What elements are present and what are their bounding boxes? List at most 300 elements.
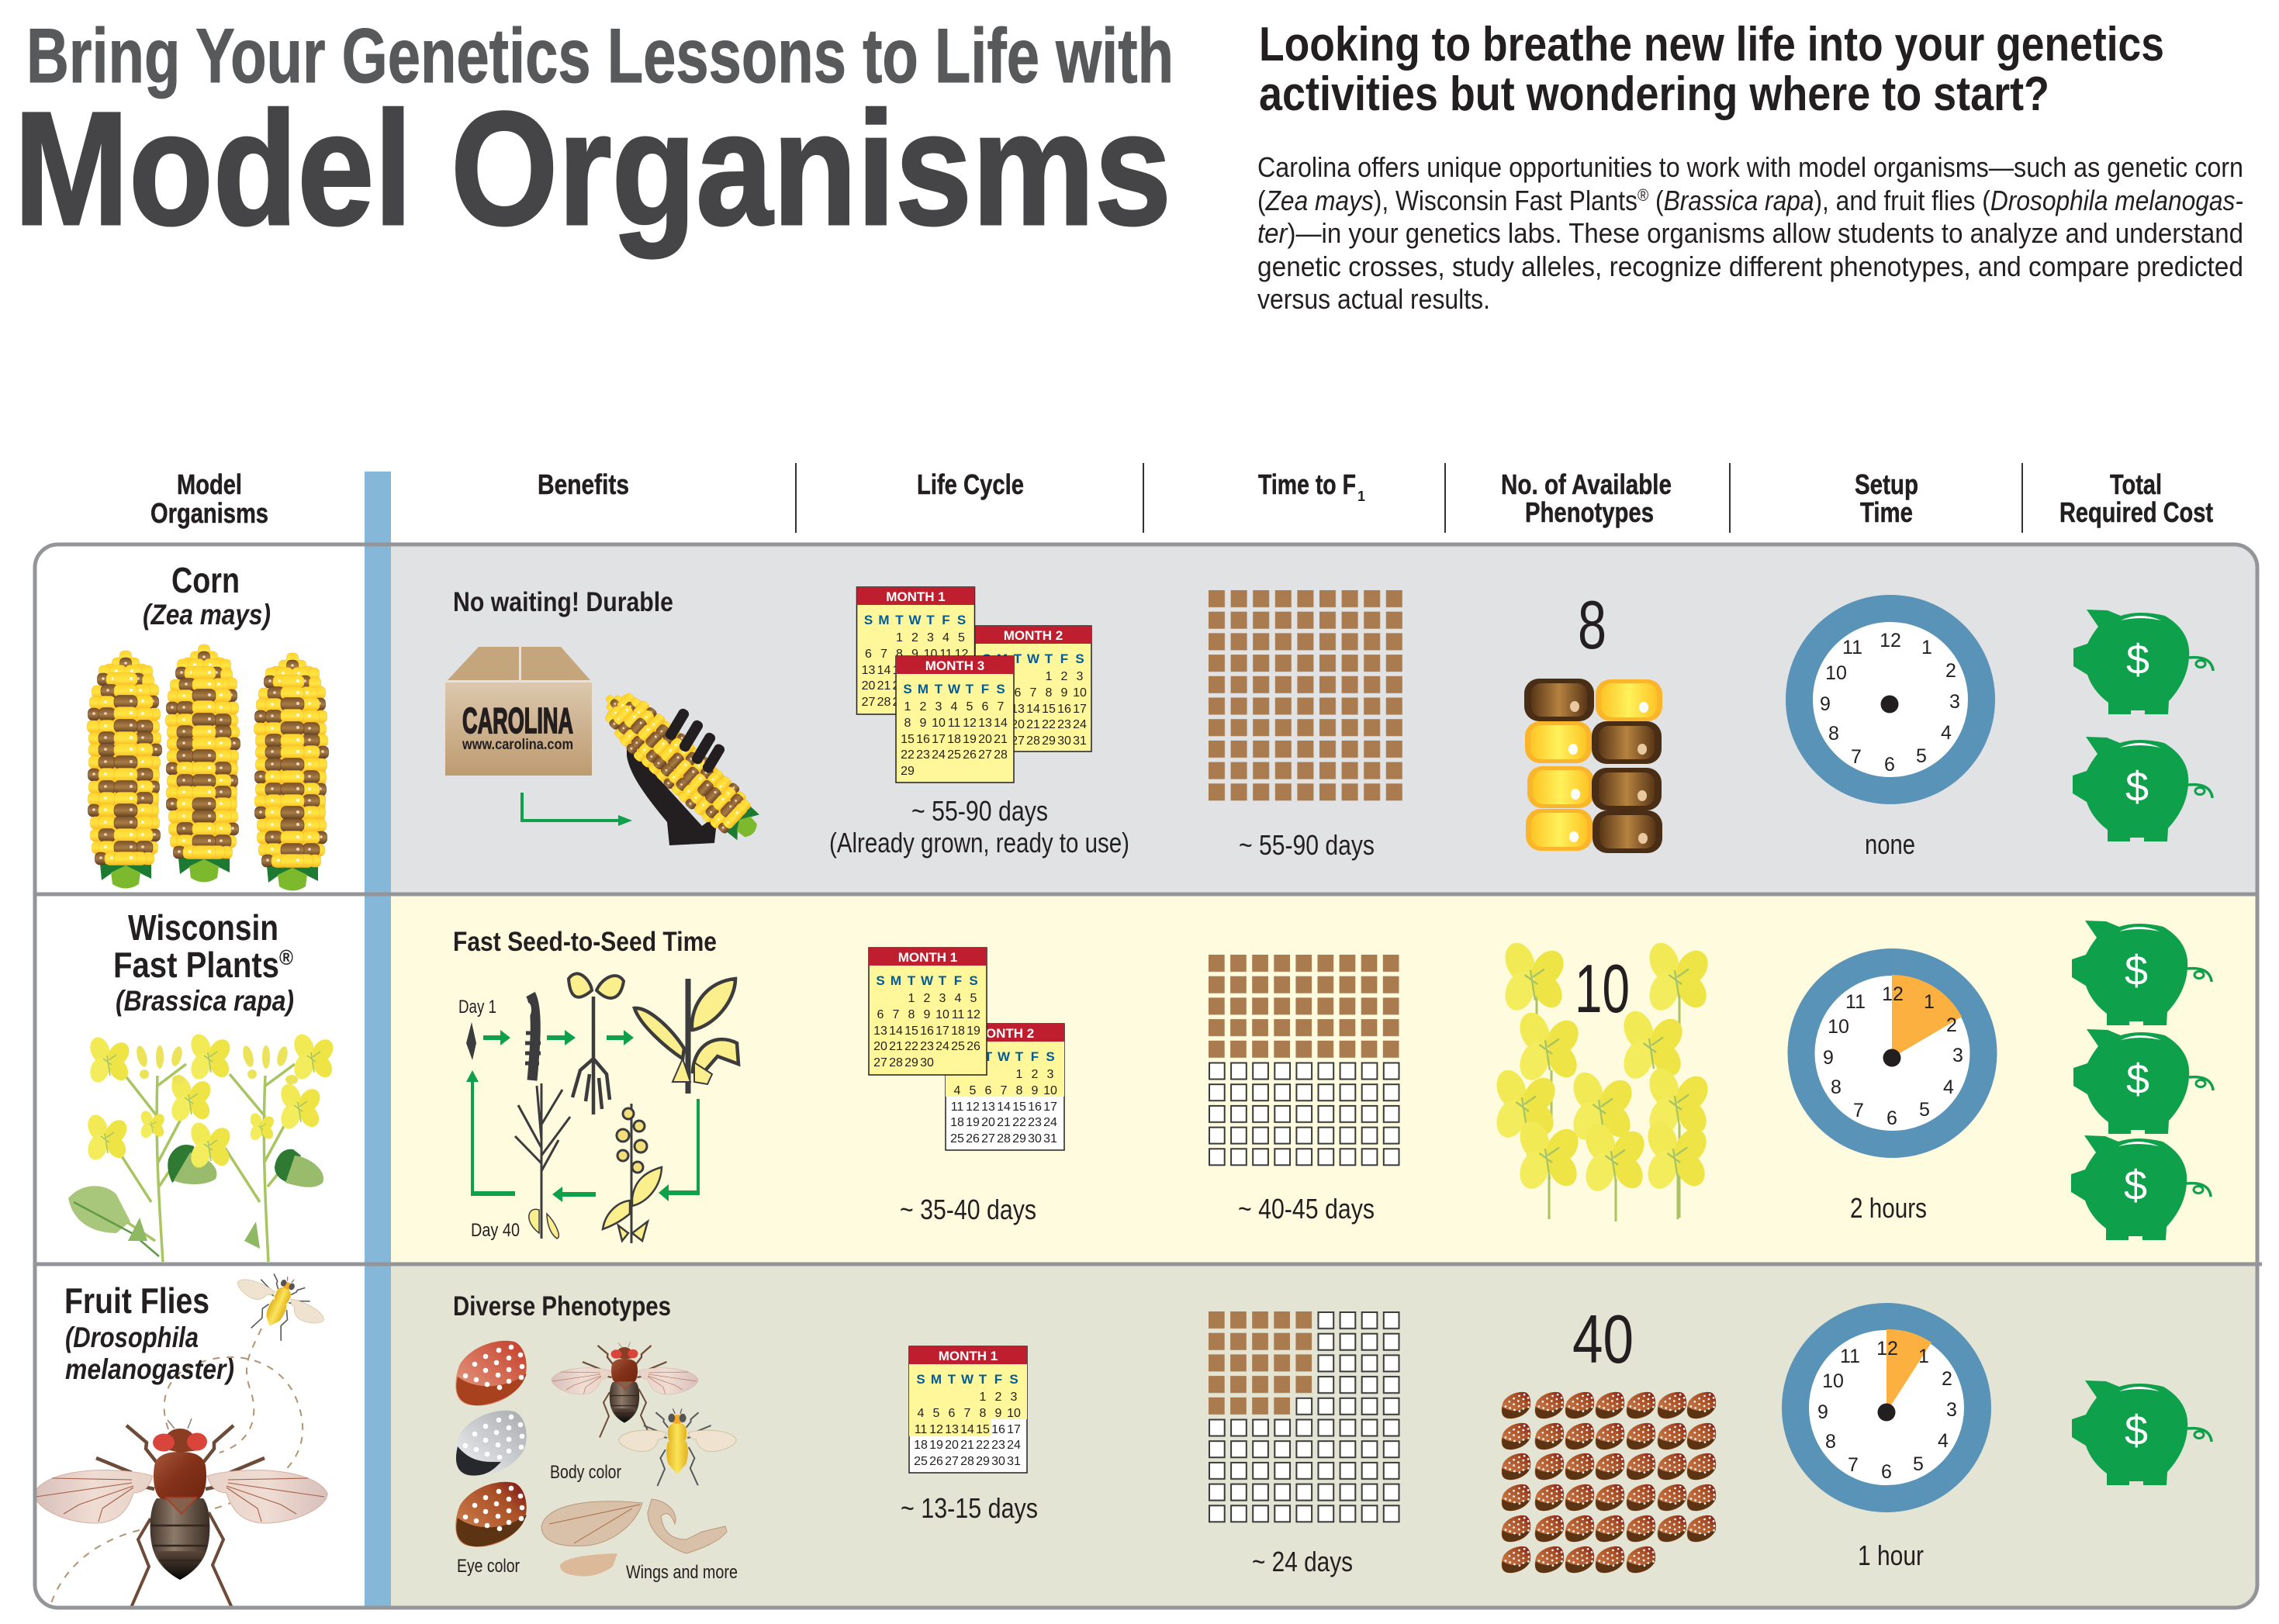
calendar month 1: 9 — [924, 1008, 931, 1021]
icon: piggy bank cost: $ — [2126, 1056, 2149, 1103]
calendar month 1: 7 — [880, 648, 887, 661]
table column headers: Required Cost — [2059, 496, 2213, 528]
calendar month 2: S — [1046, 1049, 1055, 1064]
intro paragraph: versus actual results. — [1257, 283, 1490, 315]
calendar month 2: 19 — [995, 718, 1009, 731]
calendar month 1: 20 — [862, 679, 875, 693]
fast plants benefit heading: Fast Seed-to-Seed Time — [453, 927, 717, 957]
calendar month 1: 24 — [1007, 1439, 1021, 1452]
calendar month 2: 24 — [1073, 718, 1087, 731]
calendar month 2: 27 — [1011, 734, 1025, 748]
fruit flies phenotype count: 40 — [1572, 1301, 1634, 1377]
calendar month 2: 2 — [1032, 1068, 1039, 1081]
icons: body color flies — [552, 1342, 736, 1486]
fast plants name — [113, 907, 294, 1017]
clock: no setup time: 6 — [1884, 754, 1895, 776]
corn name: Corn — [171, 560, 240, 600]
calendar month 1: 5 — [970, 992, 977, 1005]
corn phenotype count: 8 — [1578, 586, 1606, 663]
calendars: fast plants life cycle — [869, 948, 1064, 1150]
corn name: (Zea mays) — [143, 599, 271, 631]
calendar month 1: 19 — [967, 1025, 980, 1038]
calendar month 1: 13 — [862, 664, 875, 677]
calendar month 2: W — [1027, 651, 1040, 666]
table column headers — [150, 463, 2213, 533]
calendar month 2: 25 — [950, 1132, 964, 1145]
row: Wisconsin Fast Plants — [68, 907, 2213, 1262]
calendar month 2: S — [953, 1049, 962, 1064]
table column headers: Total — [2110, 468, 2162, 500]
intro paragraph: Brassica rapa), and fruit flies (Drosophila melanogas- — [1664, 185, 2277, 216]
calendar month 1: 22 — [893, 679, 906, 693]
icon: corn kernels — [1524, 679, 1662, 853]
calendar month 1: 3 — [1011, 1391, 1018, 1404]
clock: one hour setup — [1795, 1317, 1978, 1498]
table column headers: Benefits — [538, 468, 629, 500]
icon: piggy bank cost: $ — [2126, 637, 2149, 683]
illustration: small yellow fly — [223, 1259, 334, 1353]
calendar month 1: 12 — [955, 648, 968, 661]
calendar month 2: 10 — [1073, 686, 1087, 700]
calendar month 2: 7 — [1001, 1084, 1008, 1097]
calendar month 3: 21 — [994, 733, 1008, 746]
calendar month 1: 16 — [991, 1423, 1005, 1436]
calendar month 1: T — [979, 1372, 987, 1387]
fast plants phenotype count: 10 — [1575, 950, 1630, 1027]
calendar month 2: 13 — [981, 1101, 995, 1114]
setup label: 1 hour — [1858, 1539, 1924, 1571]
calendar month 1: 16 — [908, 664, 922, 677]
fruit flies name: Fruit Flies — [64, 1280, 209, 1321]
clock: two hours setup: 11 — [1845, 991, 1866, 1013]
calendar month 1: 26 — [967, 1040, 980, 1053]
corn name — [143, 560, 271, 631]
clock: no setup time: 12 — [1880, 630, 1901, 651]
calendar month 1: 7 — [964, 1407, 971, 1420]
corn time to F1 label: ~ 55-90 days — [1239, 829, 1375, 861]
calendar month 1: 27 — [862, 696, 875, 709]
icon: piggy bank cost — [2073, 610, 2213, 841]
table column headers: Phenotypes — [1525, 496, 1654, 528]
calendar month 2: T — [1014, 651, 1022, 666]
calendar month 3: MONTH 3 — [925, 658, 984, 673]
calendar month 1: 27 — [945, 1455, 959, 1468]
calendar month 2: M — [967, 1049, 978, 1064]
calendar month 1: S — [969, 973, 978, 988]
calendar month 1: S — [876, 973, 885, 988]
intro paragraph: ( — [1648, 185, 1664, 216]
clock: one hour setup: 3 — [1946, 1399, 1957, 1421]
calendar month 1: 11 — [952, 1008, 964, 1021]
calendar month 2: 29 — [1012, 1132, 1026, 1145]
intro heading — [1259, 18, 2164, 121]
calendar month 1: 4 — [955, 992, 962, 1005]
calendar month 3: 23 — [916, 748, 930, 762]
calendar month 1: 14 — [877, 664, 891, 677]
calendar month 1: 5 — [958, 631, 965, 644]
diagram: seed to seed life cycle — [458, 973, 738, 1243]
intro paragraph — [1257, 151, 2243, 315]
clock: no setup time: 1 — [1921, 637, 1932, 658]
calendar month 3: T — [966, 682, 974, 696]
calendar month 1: 30 — [991, 1455, 1005, 1468]
fast plants name: Fast Plants — [113, 945, 303, 985]
calendar month 1: T — [948, 1372, 956, 1387]
calendar month 2: 28 — [1026, 734, 1040, 748]
calendar month 2: 10 — [1043, 1084, 1057, 1097]
calendar month 2: 19 — [966, 1116, 980, 1129]
calendar month 1: S — [916, 1372, 925, 1387]
calendar month 2: 7 — [1030, 686, 1037, 700]
calendar month 2: 5 — [970, 1084, 977, 1097]
calendar month 1: 30 — [908, 696, 922, 709]
calendar month 2: 8 — [1046, 686, 1053, 700]
calendar month 2: 17 — [1043, 1101, 1057, 1114]
clock: no setup time: 2 — [1945, 660, 1956, 682]
calendar month 3: F — [981, 682, 989, 696]
title: Bring Your Genetics Lessons to Life with — [26, 12, 1174, 98]
calendar month 1: 24 — [924, 679, 937, 693]
calendar month 2: 16 — [1028, 1101, 1042, 1114]
title — [14, 12, 1174, 259]
clock: no setup time: 11 — [1842, 637, 1862, 658]
corn life cycle label: (Already grown, ready to use) — [829, 827, 1129, 859]
clock: two hours setup: 4 — [1943, 1076, 1954, 1098]
arrow head — [618, 815, 632, 826]
fruit flies name: (Drosophila — [65, 1322, 199, 1353]
table column headers: Model — [177, 468, 242, 500]
calendar month 2: T — [1045, 651, 1053, 666]
calendar month 2: 9 — [1061, 686, 1068, 700]
clock: no setup time: 9 — [1820, 693, 1831, 715]
clock: one hour setup: 6 — [1881, 1461, 1892, 1483]
calendar month 1: 23 — [908, 679, 922, 693]
calendar month 2: 21 — [1026, 718, 1040, 731]
corn benefit heading: No waiting! Durable — [453, 587, 673, 617]
calendar month 3: 2 — [920, 700, 927, 714]
illustration: corn cobs — [87, 644, 329, 890]
calendar month 1: S — [957, 613, 966, 627]
icon: Carolina box: www.carolina.com — [462, 737, 573, 753]
row: corn — [87, 560, 2213, 890]
calendar month 3: 24 — [932, 748, 946, 762]
calendar month 1: M — [931, 1372, 942, 1387]
clock: two hours setup: 9 — [1823, 1047, 1834, 1069]
fruit flies name: melanogaster) — [65, 1353, 234, 1385]
calendar month 2: 25 — [980, 734, 994, 748]
eye color label: Eye color — [457, 1556, 520, 1577]
calendar month 2: 4 — [954, 1084, 961, 1097]
table frame — [35, 544, 2262, 1608]
calendar month 1: 15 — [904, 1025, 918, 1038]
icon: piggy bank cost: $ — [2125, 948, 2148, 994]
table column headers: Setup — [1855, 468, 1918, 500]
calendar month 2: 2 — [1061, 670, 1068, 683]
calendar month 1: 21 — [889, 1040, 903, 1053]
calendar month 1: 19 — [929, 1439, 943, 1452]
calendar month 3: 27 — [978, 748, 992, 762]
calendar month 1: 12 — [967, 1008, 980, 1021]
calendar month 1: 8 — [908, 1008, 915, 1021]
calendar month 2 — [975, 626, 1091, 752]
intro heading: Looking to breathe new life into your genetics — [1259, 18, 2164, 71]
calendar month 1: 20 — [873, 1040, 887, 1053]
calendar month 2: 18 — [980, 718, 994, 731]
calendar month 2: S — [982, 651, 991, 666]
calendar month 2: 31 — [1043, 1132, 1057, 1145]
calendar month 2: 15 — [1042, 703, 1056, 716]
clock: two hours setup: 10 — [1828, 1016, 1849, 1038]
wings label: Wings and more — [626, 1562, 738, 1583]
icon: piggy bank cost: $ — [2125, 764, 2149, 810]
calendar month 1: M — [878, 613, 890, 627]
calendar month 1: 11 — [939, 648, 953, 661]
calendar month 2: 20 — [981, 1116, 995, 1129]
calendar month 1: MONTH 1 — [939, 1349, 998, 1363]
calendar month 1: 28 — [877, 696, 891, 709]
table background — [35, 472, 2257, 1608]
calendar month 2 — [946, 1024, 1064, 1150]
fast plants time to F1 label: ~ 40-45 days — [1238, 1193, 1375, 1225]
calendar month 3: 17 — [932, 733, 946, 746]
calendar month 3: S — [903, 682, 912, 696]
icon: piggy bank cost: $ — [2124, 1163, 2147, 1209]
day 1 label: Day 1 — [458, 997, 496, 1018]
calendar month 3: 3 — [935, 700, 942, 714]
calendar month 1: 17 — [1007, 1423, 1021, 1436]
calendar month 1: 18 — [914, 1439, 928, 1452]
calendar month 3: 14 — [994, 717, 1008, 730]
chart: fast plants time to F1 squares — [1209, 955, 1404, 1170]
calendar month 2: 18 — [950, 1116, 964, 1129]
calendar month 2: 22 — [1042, 718, 1056, 731]
clock: one hour setup: 8 — [1825, 1431, 1836, 1453]
calendar month 1: 5 — [933, 1407, 940, 1420]
calendar month 1: 21 — [877, 679, 891, 693]
table column headers: 1 — [1357, 489, 1365, 504]
calendar month 1: 4 — [918, 1407, 925, 1420]
calendar month 3: 6 — [982, 700, 989, 714]
calendar month 1: 6 — [865, 648, 872, 661]
clock: no setup time: 10 — [1825, 662, 1847, 684]
fast plants name: ® — [279, 945, 293, 969]
calendar month 1: 23 — [991, 1439, 1005, 1452]
fruit flies benefit heading: Diverse Phenotypes — [453, 1291, 671, 1322]
calendar month 2: 16 — [1057, 703, 1071, 716]
calendar month 3: 18 — [947, 733, 961, 746]
clock: no setup time: 5 — [1916, 745, 1927, 767]
icon: piggy bank cost — [2071, 921, 2213, 1240]
table column headers: Time — [1860, 496, 1913, 528]
calendar month 2: 13 — [1011, 703, 1025, 716]
cycle arrows — [466, 1030, 700, 1202]
calendar month 2: 21 — [997, 1116, 1011, 1129]
calendar month 2: 31 — [1073, 734, 1087, 748]
calendar month 3 — [896, 656, 1014, 783]
calendar month 1: 18 — [951, 1025, 965, 1038]
calendar month 2: F — [1031, 1049, 1039, 1064]
calendar month 1: 13 — [945, 1423, 959, 1436]
clock: no setup time: 4 — [1941, 722, 1952, 744]
calendar month 1: 14 — [889, 1025, 903, 1038]
calendar month 1: 10 — [1007, 1407, 1021, 1420]
calendar month 1: 29 — [976, 1455, 990, 1468]
calendar month 2: 29 — [1042, 734, 1056, 748]
calendar month 1: 25 — [939, 679, 953, 693]
calendar month 2: 26 — [966, 1132, 980, 1145]
clock: two hours setup: 1 — [1924, 991, 1935, 1013]
calendar month 1: 18 — [939, 664, 953, 677]
calendar month 2: F — [1060, 651, 1068, 666]
calendar month 1: 25 — [914, 1455, 928, 1468]
calendar month 2: MONTH 2 — [1004, 628, 1063, 643]
calendar month 1: MONTH 1 — [886, 589, 946, 604]
calendar month 3: 15 — [901, 733, 915, 746]
calendar month 2: M — [997, 651, 1008, 666]
calendars: corn life cycle — [856, 587, 1091, 783]
calendar month 1: 12 — [929, 1423, 943, 1436]
table column headers: Time to F — [1258, 468, 1356, 500]
calendar month 1: 2 — [924, 992, 931, 1005]
clock: one hour setup: 9 — [1817, 1401, 1828, 1423]
calendar month 2: 6 — [985, 1084, 992, 1097]
calendar month 1: W — [921, 973, 934, 988]
calendar month 3: 7 — [998, 700, 1005, 714]
illustration: large fruit fly — [34, 1418, 327, 1609]
icon: Carolina box — [445, 647, 592, 776]
clock: two hours setup — [1801, 962, 1983, 1145]
calendar month 1: MONTH 1 — [898, 950, 957, 965]
calendar month 1: 19 — [955, 664, 968, 677]
calendar month 3: 5 — [967, 700, 974, 714]
calendar month 1: 22 — [976, 1439, 990, 1452]
calendar month 2: 8 — [1016, 1084, 1023, 1097]
calendar month 1: F — [994, 1372, 1002, 1387]
calendar month 1: 25 — [951, 1040, 965, 1053]
icon: hand holding corn — [590, 679, 770, 852]
clock: one hour setup: 11 — [1840, 1346, 1860, 1367]
calendar month 1: M — [891, 973, 901, 988]
calendar month 1: 23 — [920, 1040, 934, 1053]
flight path dashes — [51, 1329, 303, 1603]
calendar month 2: T — [1015, 1049, 1024, 1064]
calendar month 2: 14 — [1026, 703, 1040, 716]
calendar month 2: MONTH 2 — [975, 1026, 1034, 1041]
calendar month 1: F — [954, 973, 962, 988]
calendar month 1: T — [926, 613, 935, 627]
calendar month 3: M — [918, 682, 929, 696]
clock: one hour setup: 12 — [1876, 1338, 1898, 1360]
calendar month 2: S — [1075, 651, 1084, 666]
calendar month 1: 20 — [945, 1439, 959, 1452]
calendar month 1: 26 — [955, 679, 968, 693]
calendar month 1: 1 — [908, 992, 915, 1005]
growth stage sketches — [466, 973, 738, 1243]
calendar month 1: 31 — [1007, 1455, 1021, 1468]
icon: piggy bank cost: $ — [2125, 1408, 2148, 1454]
calendar month 1: S — [864, 613, 873, 627]
illustration: brassica plants — [68, 1031, 337, 1262]
fruit flies name — [64, 1280, 234, 1385]
calendar month 1: F — [942, 613, 950, 627]
calendar month 1: 1 — [980, 1391, 987, 1404]
calendar month 3: 8 — [904, 717, 911, 730]
calendar month 1: S — [1009, 1372, 1018, 1387]
clock: no setup time: 3 — [1949, 691, 1960, 713]
calendar month 3: 28 — [994, 748, 1008, 762]
calendar month 1: 17 — [924, 664, 937, 677]
clock: no setup time: 7 — [1851, 746, 1862, 768]
calendar month 2: 28 — [997, 1132, 1011, 1145]
calendar month 1: 8 — [980, 1407, 987, 1420]
arrow: box to hand — [522, 793, 625, 821]
calendar month 2: 3 — [1047, 1068, 1054, 1081]
calendar month 2: 11 — [951, 1101, 963, 1114]
corn life cycle label — [829, 795, 1129, 859]
calendar month 3: 16 — [916, 733, 930, 746]
calendar month 2: 22 — [1012, 1116, 1026, 1129]
table column headers: Organisms — [150, 497, 268, 529]
calendar month 1 — [869, 948, 987, 1075]
calendar month 1: 3 — [927, 631, 934, 644]
calendar month 3: 19 — [963, 733, 977, 746]
calendar month 2: 27 — [981, 1132, 995, 1145]
table column headers: Life Cycle — [917, 468, 1024, 500]
calendar month 2: 23 — [1057, 718, 1071, 731]
calendar month 1: 3 — [939, 992, 946, 1005]
calendar month 1: 22 — [904, 1040, 918, 1053]
calendar month 1: 2 — [911, 631, 918, 644]
calendar month 3: 29 — [901, 765, 915, 778]
calendar month 2: 20 — [1011, 718, 1025, 731]
fast plants name: (Brassica rapa) — [116, 985, 294, 1017]
calendar month 1: 17 — [935, 1025, 949, 1038]
fruit flies time to F1 label: ~ 24 days — [1252, 1546, 1353, 1577]
setup label: none — [1865, 828, 1915, 860]
calendar month 1: 15 — [893, 664, 906, 677]
clock: two hours setup: 3 — [1952, 1045, 1963, 1066]
clock: one hour setup: 2 — [1942, 1368, 1952, 1390]
calendar month 1: 1 — [896, 631, 903, 644]
calendar month 1: 9 — [911, 648, 918, 661]
icons: wing variants — [541, 1499, 727, 1576]
calendar month 1 — [856, 587, 974, 714]
calendar month 2: 17 — [1073, 703, 1087, 716]
clock: two hours setup: 8 — [1831, 1076, 1842, 1098]
calendar month 1: 8 — [896, 648, 903, 661]
calendar month 2: 1 — [1046, 670, 1053, 683]
clock: one hour setup: 5 — [1913, 1453, 1924, 1475]
corn life cycle label: ~ 55-90 days — [911, 795, 1048, 827]
calendar month 2: T — [984, 1049, 993, 1064]
clock: two hours setup: 12 — [1882, 983, 1904, 1005]
icon: ten flowers — [1492, 938, 1714, 1221]
calendar month 2: 30 — [1028, 1132, 1042, 1145]
calendar month 1: T — [939, 973, 947, 988]
icon: Carolina box: CAROLINA — [462, 700, 573, 741]
calendar month 3: 12 — [963, 717, 977, 730]
clock: two hours setup: 5 — [1919, 1099, 1930, 1121]
calendar month 3: 20 — [978, 733, 992, 746]
calendar month 1: 30 — [920, 1056, 934, 1069]
calendar month 1: 6 — [949, 1407, 956, 1420]
clock: one hour setup: 10 — [1822, 1370, 1844, 1392]
calendar month 1: 4 — [942, 631, 949, 644]
calendar month 1: 2 — [995, 1391, 1002, 1404]
calendar month 1: 27 — [873, 1056, 887, 1069]
calendar month 1: 11 — [915, 1423, 927, 1436]
icons: eye color variants — [455, 1341, 527, 1547]
